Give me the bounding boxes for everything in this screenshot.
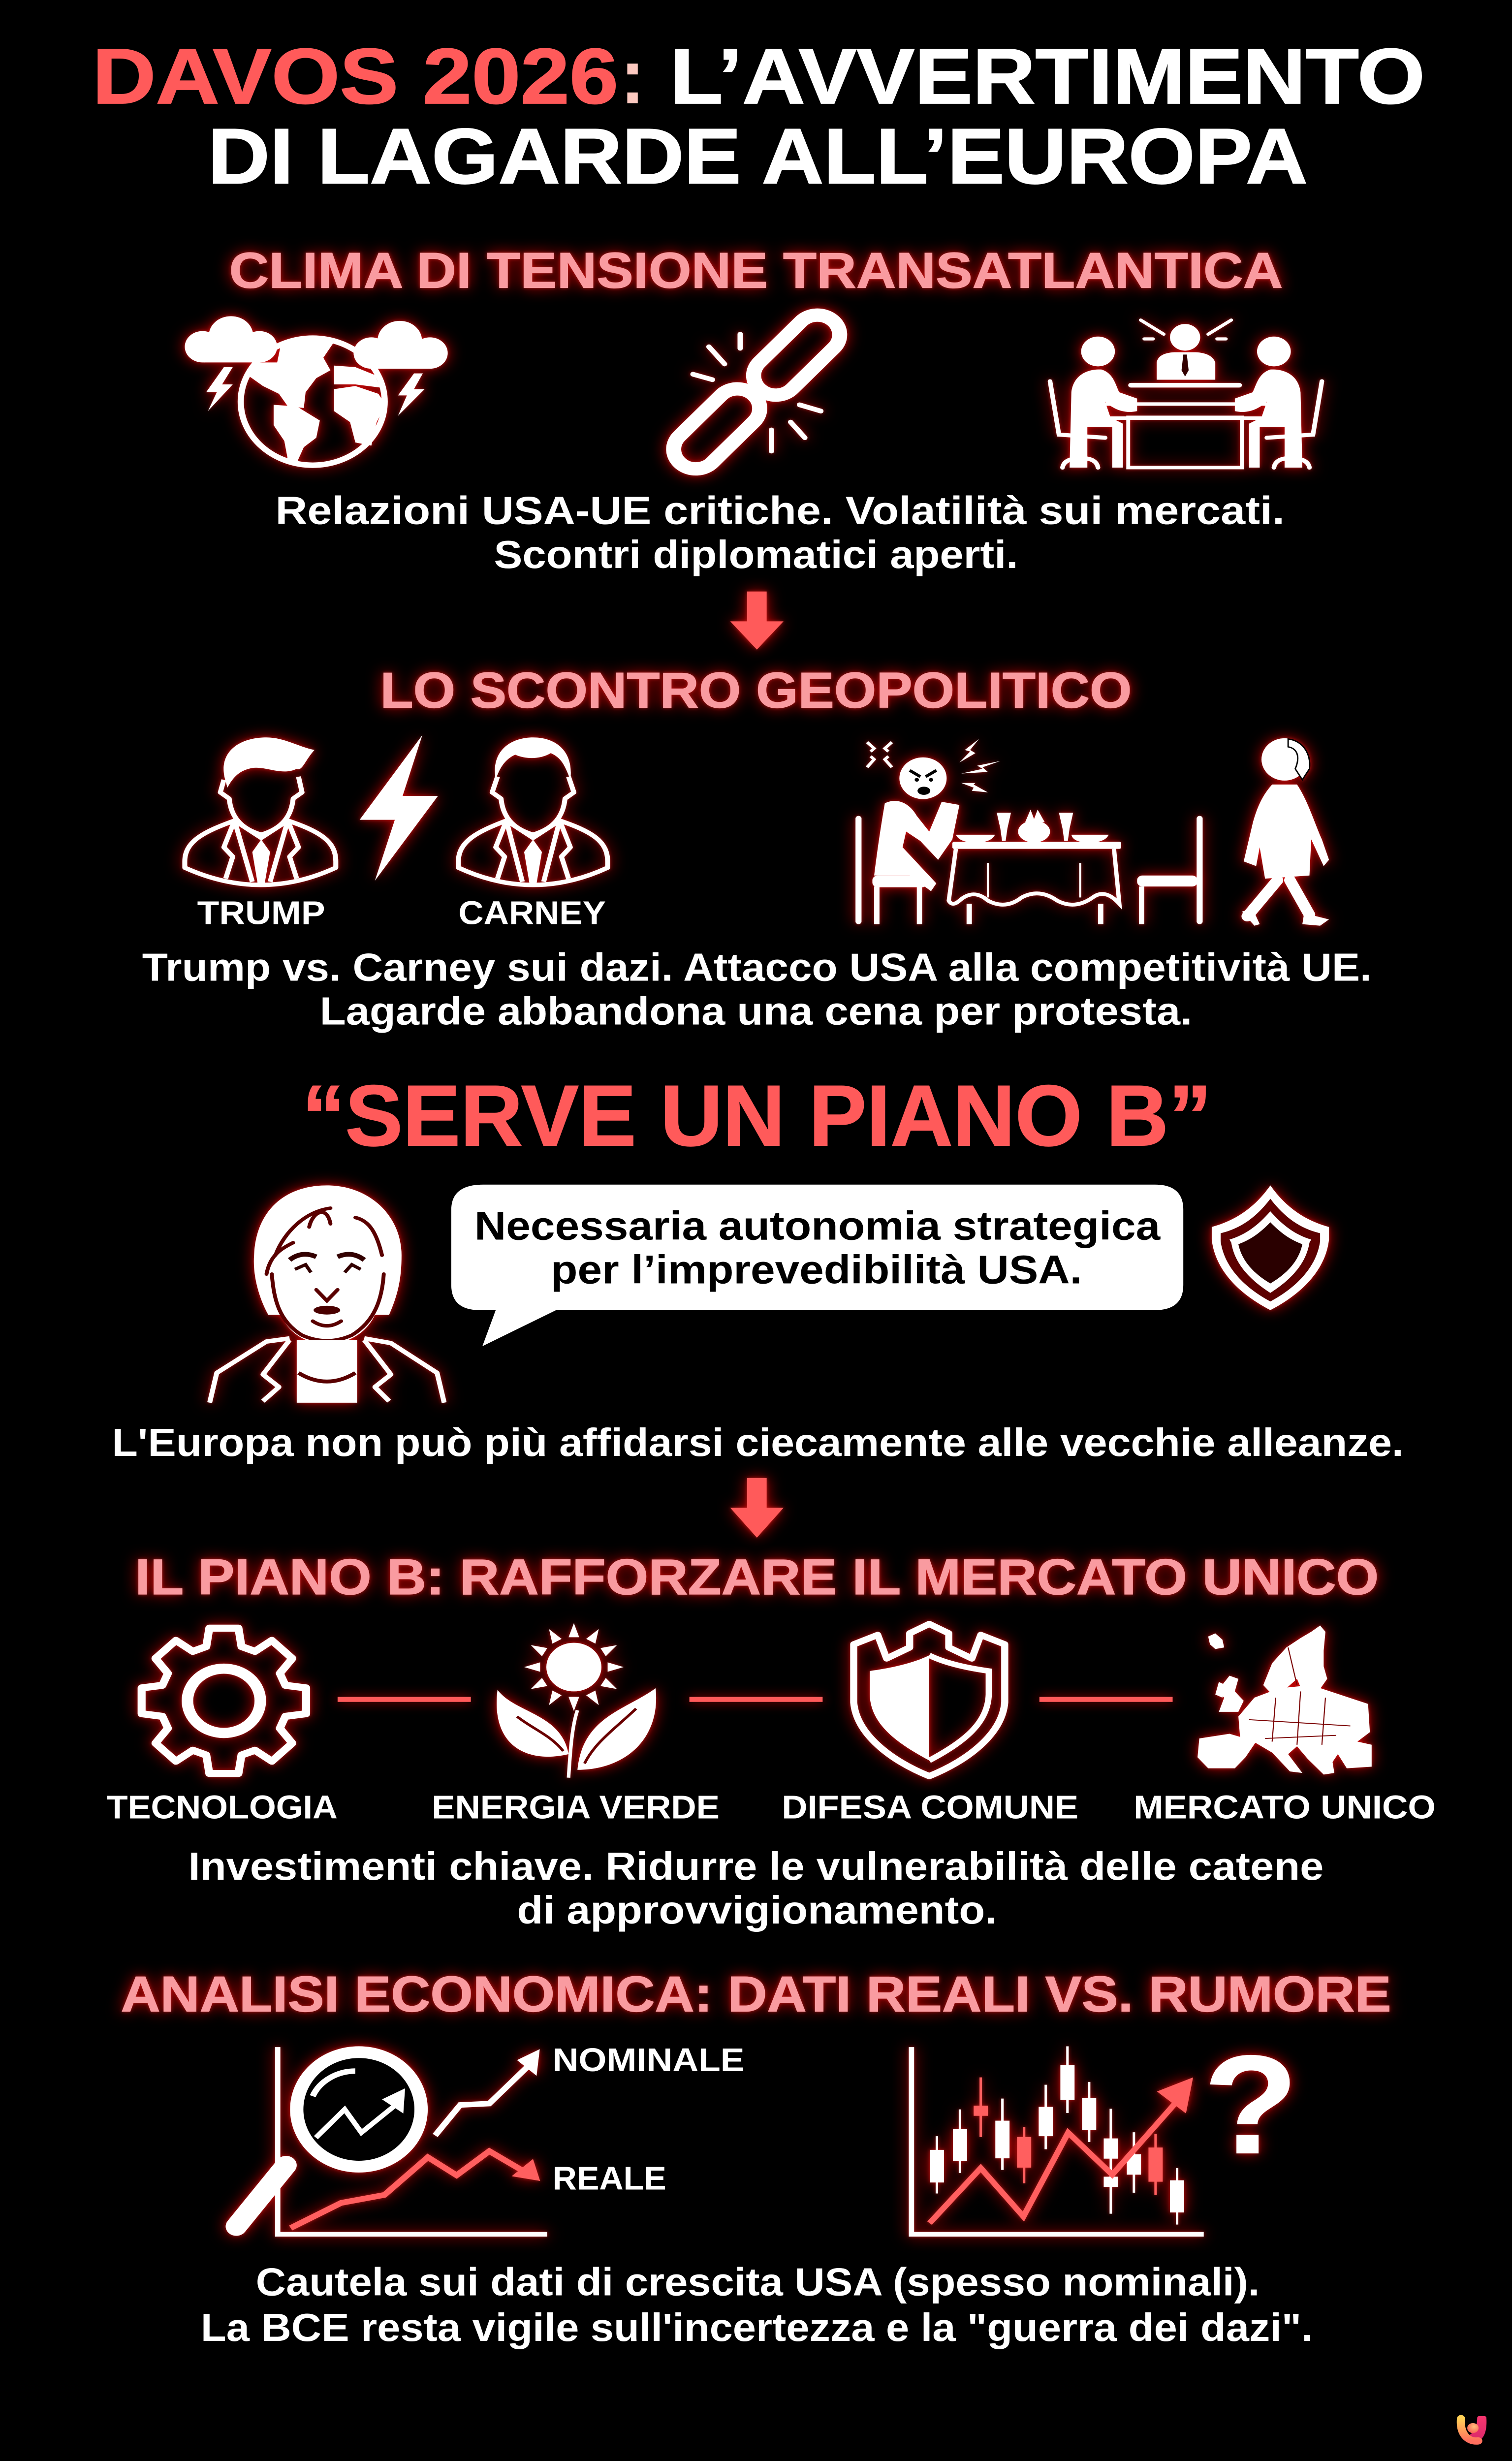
speech bubble [451, 1185, 1183, 1346]
icon: gear [142, 1628, 306, 1773]
text: trump vs carney [142, 946, 1372, 1033]
text: investimenti chiave: Investimenti chiave. Ridurre le vulnerabilità delle catene [189, 1845, 1323, 1889]
connector 1 [338, 1697, 471, 1702]
panel: clima di tensione transatlantica [185, 243, 1322, 577]
labels: pillars [107, 1789, 1436, 1826]
label: reale: REALE [553, 2160, 666, 2197]
label: carney: CARNEY [458, 895, 606, 932]
arrow: down 1 [730, 592, 784, 650]
icon: angry diner at table [855, 739, 1203, 924]
text: cautela sui dati [201, 2261, 1313, 2350]
icon: shield [1212, 1185, 1329, 1310]
chart: nominal vs real with magnifier [236, 2047, 547, 2234]
text: trump vs carney: Trump vs. Carney sui dazi. Attacco USA alla competitività UE. [142, 946, 1372, 989]
icon: globe with storm clouds [185, 316, 448, 465]
icon: lagarde portrait [210, 1185, 444, 1403]
text: trump vs carney: Lagarde abbandona una cena per protesta. [320, 989, 1192, 1033]
text: investimenti chiave: di approvvigionamento. [517, 1889, 997, 1932]
arrow: down 2 [730, 1478, 784, 1538]
icon: lightning bolt [360, 735, 438, 881]
connector 2 [690, 1697, 822, 1702]
title: DAVOS 2026 [93, 33, 618, 120]
heading: serve un piano b: “SERVE UN PIANO B” [302, 1067, 1212, 1164]
panel: serve un piano b [112, 1067, 1404, 1465]
heading: lo scontro: LO SCONTRO GEOPOLITICO [380, 663, 1132, 719]
title: : [620, 33, 645, 120]
heading: clima di tensione: CLIMA DI TENSIONE TRANSATLANTICA [229, 243, 1283, 299]
panel: lo scontro geopolitico [142, 663, 1372, 1033]
heading: analisi economica: ANALISI ECONOMICA: DATI REALI VS. RUMORE [121, 1966, 1391, 2022]
text: relazioni USA-UE [276, 489, 1285, 577]
title [93, 33, 1425, 200]
labels: pillars: MERCATO UNICO [1134, 1789, 1436, 1826]
panel: analisi economica [121, 1966, 1391, 2350]
title: L’AVVERTIMENTO [670, 33, 1425, 120]
text: vecchie alleanze: L'Europa non può più affidarsi ciecamente alle vecchie alleanze. [112, 1421, 1404, 1465]
icon: trump bust [185, 737, 336, 885]
labels: pillars: ENERGIA VERDE [432, 1789, 720, 1826]
connector 3 [1040, 1697, 1173, 1702]
text: cautela sui dati: Cautela sui dati di crescita USA (spesso nominali). [256, 2261, 1260, 2304]
speech bubble: Necessaria autonomia strategica [474, 1203, 1161, 1248]
label: nominale: NOMINALE [553, 2042, 745, 2079]
icon: carney bust [458, 737, 608, 885]
title: DI LAGARDE ALL’EUROPA [208, 113, 1308, 200]
heading: il piano b: IL PIANO B: RAFFORZARE IL MERCATO UNICO [135, 1549, 1379, 1605]
text: relazioni USA-UE: Scontri diplomatici aperti. [494, 533, 1018, 577]
icon: common defence shield [854, 1624, 1005, 1776]
labels: pillars: TECNOLOGIA [107, 1789, 338, 1826]
icon: walking woman [1242, 738, 1329, 926]
icon: green energy flower [497, 1623, 656, 1778]
icon: tense meeting [1050, 320, 1322, 468]
icon: broken chain [664, 307, 849, 477]
text: relazioni USA-UE: Relazioni USA-UE critiche. Volatilità sui mercati. [276, 489, 1285, 533]
text: cautela sui dati: La BCE resta vigile sull'incertezza e la "guerra dei dazi". [201, 2306, 1313, 2350]
chart: candlesticks noise [912, 2046, 1204, 2234]
icon: europe map [1197, 1626, 1372, 1774]
icon: question mark: ? [1203, 2026, 1299, 2183]
panel: il piano b [107, 1549, 1436, 1932]
text: investimenti chiave [189, 1845, 1323, 1932]
icon: corner logo [1461, 2418, 1484, 2441]
labels: pillars: DIFESA COMUNE [782, 1789, 1078, 1826]
label: trump: TRUMP [197, 895, 325, 932]
speech bubble: per l’imprevedibilità USA. [551, 1248, 1082, 1292]
